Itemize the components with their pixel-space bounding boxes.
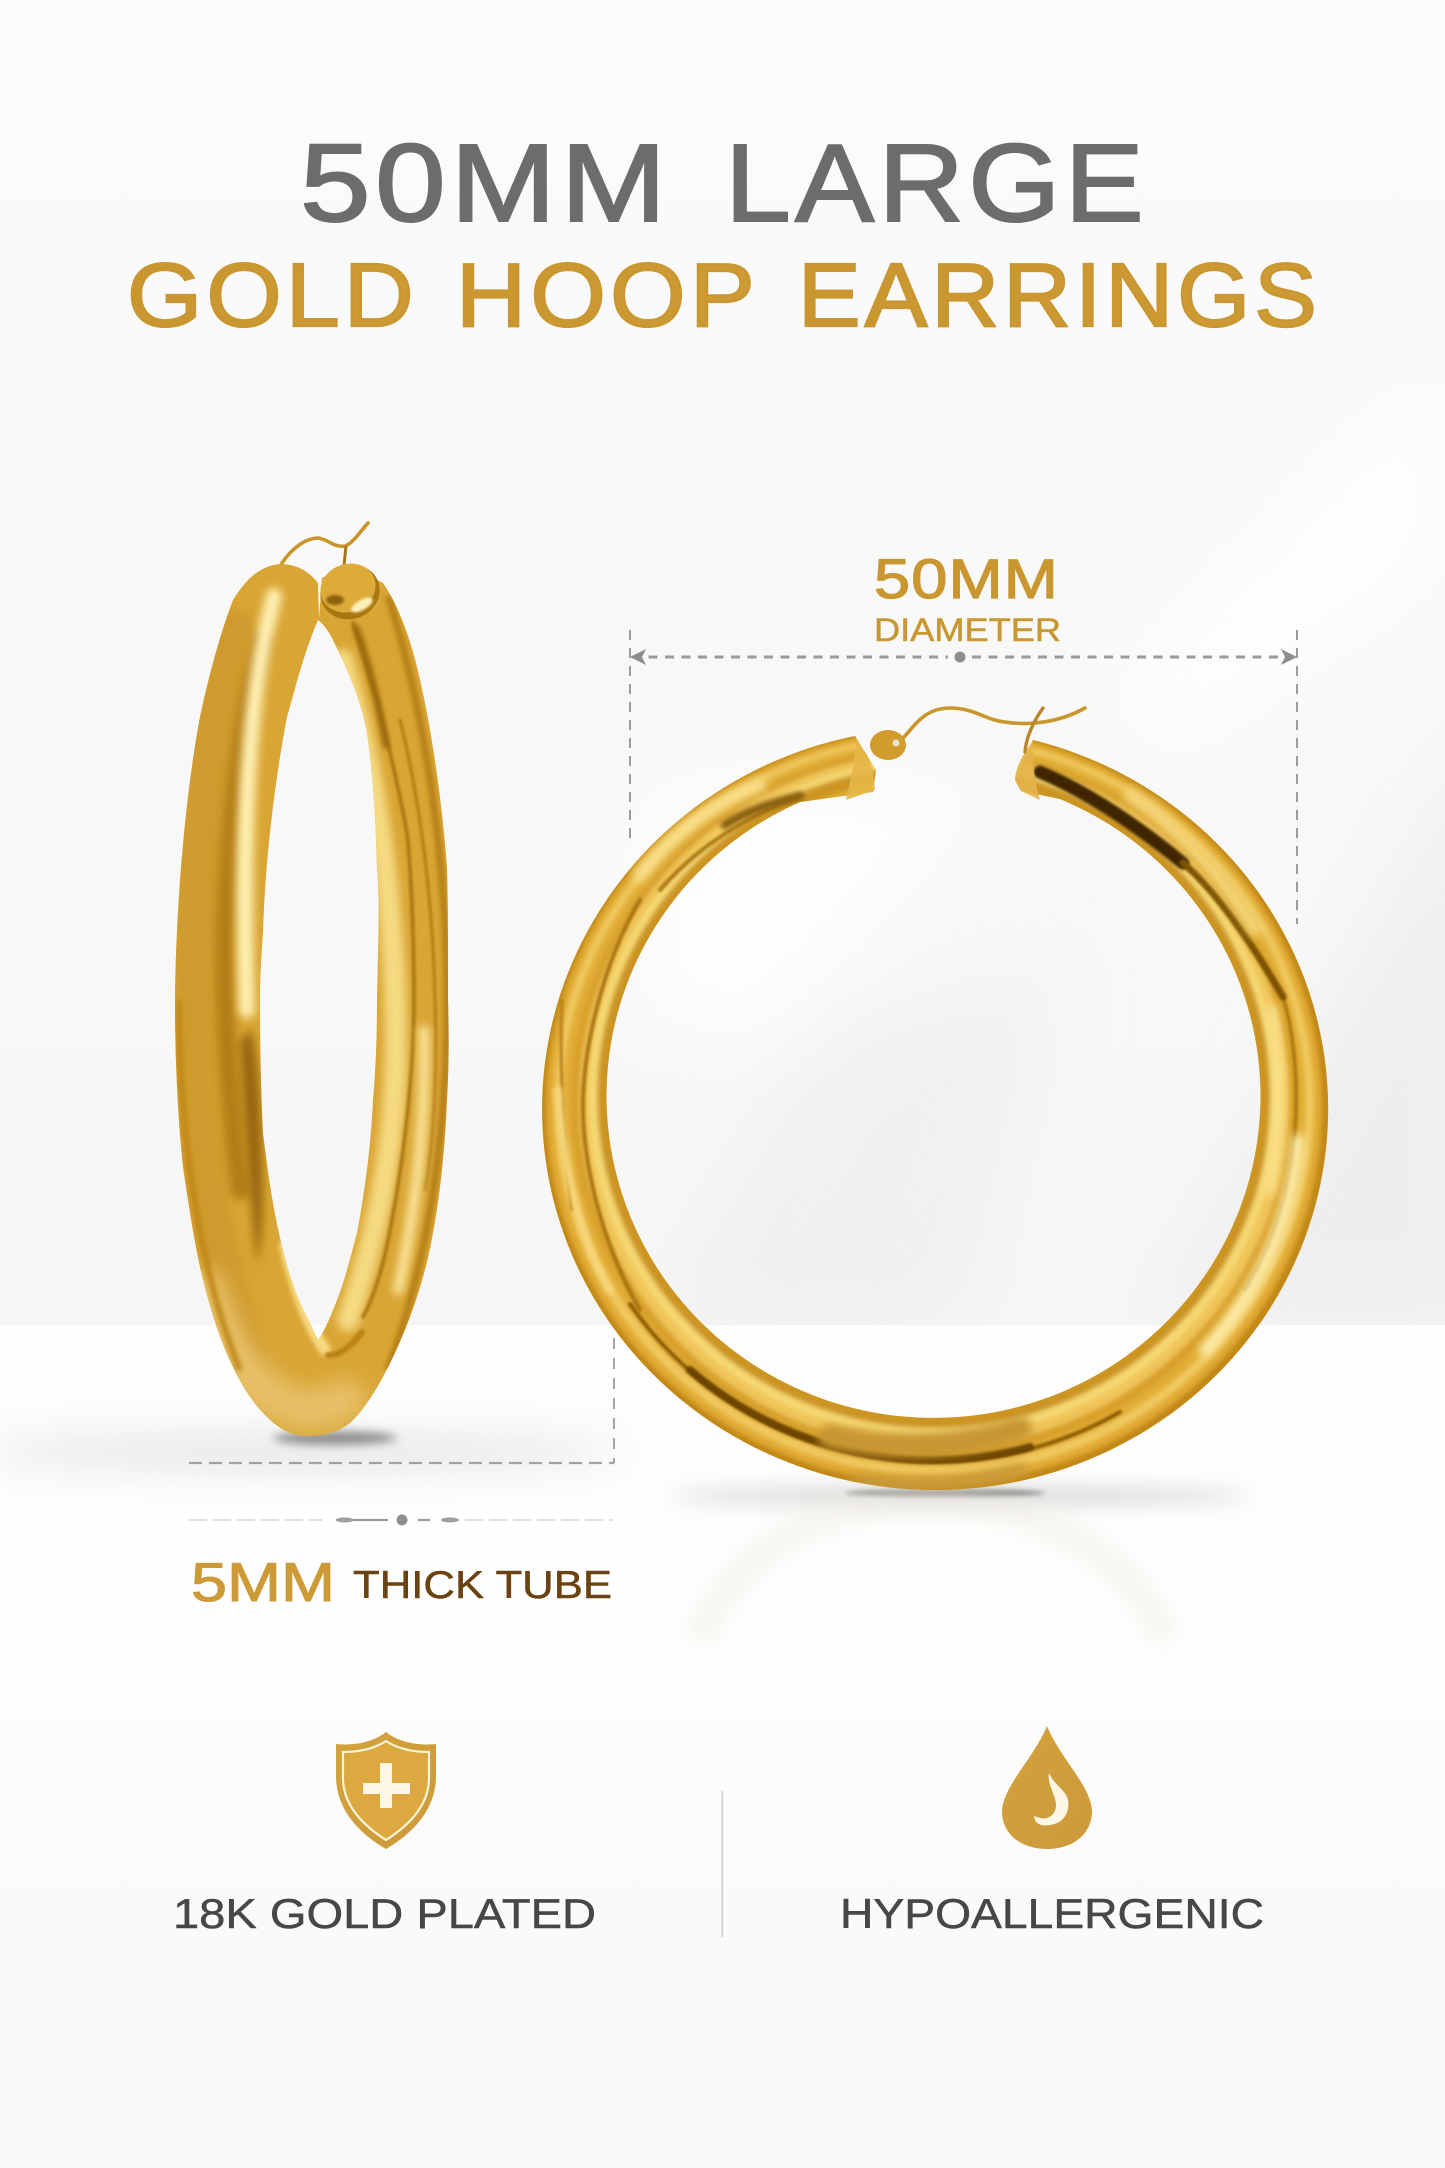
- title line 2: GOLD HOOP EARRINGS: EARRINGS: [798, 246, 1321, 346]
- left tube shading: [179, 596, 345, 1410]
- upper left highlight: [640, 785, 760, 875]
- left hoop, side view: [170, 523, 460, 1445]
- groove line around right side: [1245, 997, 1296, 1290]
- feature: 18K gold plated: [173, 1732, 596, 1937]
- dashed arrow: [630, 630, 1297, 924]
- icon: drop: [1002, 1726, 1092, 1849]
- upper right dark band: [1040, 772, 1183, 863]
- title: [127, 122, 1321, 346]
- label: HYPOALLERGENIC: [840, 1890, 1264, 1937]
- bottom dark line: [630, 1304, 1120, 1461]
- bracket dashed line: [189, 1338, 614, 1463]
- title line 2: GOLD HOOP EARRINGS: GOLD: [127, 246, 418, 346]
- feature: hypoallergenic: [840, 1726, 1264, 1937]
- title line 2: GOLD HOOP EARRINGS: HOOP: [456, 246, 759, 346]
- floor shadows and reflection: [0, 1431, 1250, 1640]
- concentric tube bands: [544, 730, 1324, 1486]
- 5MM label: 5MM: [191, 1551, 335, 1613]
- dimension: diameter: [630, 547, 1297, 924]
- left hoop hook wire: [282, 523, 368, 563]
- title line 1: 50MM LARGE: [300, 122, 1148, 245]
- upper left dark streak: [660, 800, 790, 890]
- thickness marker line: [189, 1514, 613, 1526]
- divider: [722, 1791, 723, 1937]
- right tube shading: [328, 596, 447, 1370]
- right highlight: [1205, 1140, 1298, 1350]
- right hoop left cap: [846, 737, 875, 800]
- right hoop, front view: [530, 708, 1340, 1500]
- left highlights: [558, 1090, 610, 1290]
- icon: shield: [336, 1732, 436, 1849]
- title line 2: GOLD HOOP EARRINGS: [127, 246, 1321, 346]
- bottom matte zone: [830, 1428, 1020, 1445]
- left hoop end cap disc: [313, 556, 387, 628]
- right upper highlight: [1130, 795, 1255, 930]
- title line 1: 50MM LARGE: 50MM: [300, 122, 671, 245]
- right hoop right cap: [1015, 741, 1040, 800]
- DIAMETER label: DIAMETER: [874, 612, 1061, 648]
- hook loop: [1025, 708, 1043, 752]
- THICK TUBE label: THICK TUBE: [353, 1564, 612, 1607]
- dimension: tube thickness: [189, 1338, 614, 1613]
- title line 1: 50MM LARGE: LARGE: [725, 122, 1148, 245]
- groove lines around left side: [561, 1000, 572, 1210]
- hook wire: [904, 708, 1085, 737]
- hinge ball: [870, 730, 906, 760]
- 50MM label: 50MM: [874, 547, 1059, 610]
- label: 18K GOLD PLATED: [173, 1890, 596, 1937]
